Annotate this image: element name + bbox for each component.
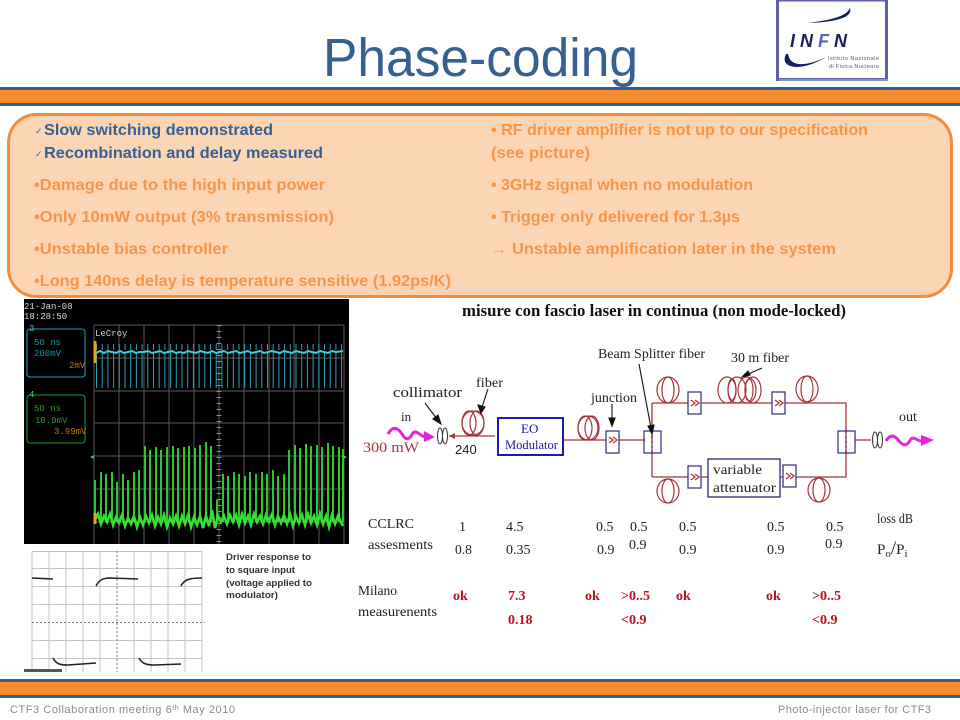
caption: driver response: Driver response to bbox=[226, 552, 311, 563]
text block: right column issues: • Trigger only delivered for 1.3µs bbox=[491, 209, 740, 226]
variable attenuator box bbox=[708, 459, 780, 497]
table: Milano measurements: ok bbox=[766, 589, 781, 604]
table: CCLRC assessments: 0.9 bbox=[679, 543, 696, 558]
channel 3 box: 200mV bbox=[34, 349, 62, 359]
footer left: CTF3 Collaboration meeting 6 bbox=[10, 704, 172, 716]
table: Milano measurements: <0.9 bbox=[621, 613, 646, 628]
text block: right column issues: • 3GHz signal when no modulation bbox=[491, 177, 753, 194]
text block: left column results: •Long 140ns delay is temperature sensitive (1.92ps/K) bbox=[34, 273, 451, 290]
text block: left column results: •Damage due to the high input power bbox=[34, 177, 325, 194]
EO modulator box: EO bbox=[521, 421, 538, 436]
table: Milano measurements bbox=[358, 584, 841, 628]
table: CCLRC assessments: 0.8 bbox=[455, 542, 472, 557]
channel 4 box: 3.99mV bbox=[54, 427, 87, 437]
table: Milano measurements: ok bbox=[585, 589, 600, 604]
title: Phase-coding bbox=[323, 28, 638, 88]
table: Milano measurements: 0.18 bbox=[508, 613, 532, 628]
table: CCLRC assessments: / bbox=[891, 538, 897, 559]
component labels: fiber bbox=[476, 376, 503, 391]
component labels: 300 mW bbox=[363, 440, 420, 456]
table: CCLRC assessments: 0.9 bbox=[767, 543, 784, 558]
text block: left column results: •Only 10mW output (3% transmission) bbox=[34, 209, 334, 226]
variable attenuator box: variable bbox=[713, 463, 762, 478]
text block: left column results: ✓ bbox=[35, 127, 43, 137]
output wave arrow bbox=[886, 435, 934, 446]
text block: left column results: •Unstable bias controller bbox=[34, 241, 228, 258]
table: Milano measurements: measurenents bbox=[358, 605, 437, 620]
channel 4 box: 4 bbox=[29, 390, 34, 400]
icon: INFN logo: IN F N bbox=[790, 31, 848, 51]
collimators bbox=[438, 428, 882, 448]
caption: driver response bbox=[226, 552, 312, 601]
fiber coils bbox=[462, 376, 830, 503]
table: CCLRC assessments: 1 bbox=[459, 520, 466, 535]
text block: left column results bbox=[34, 122, 451, 290]
component labels: junction bbox=[590, 391, 637, 406]
table: CCLRC assessments: 0.5 bbox=[826, 520, 844, 535]
EO modulator box: Modulator bbox=[505, 438, 559, 452]
component labels bbox=[363, 347, 917, 457]
chart: LeCroy oscilloscope trace: 18:28:50 bbox=[24, 312, 67, 322]
table: CCLRC assessments: o bbox=[885, 548, 891, 560]
footer right: Photo-injector laser for CTF3 bbox=[778, 704, 931, 716]
component labels: 240 bbox=[455, 442, 477, 457]
channel 3 box bbox=[27, 324, 86, 377]
trigger markers bbox=[94, 341, 96, 524]
EO modulator box bbox=[498, 418, 563, 455]
fiber lines bbox=[449, 403, 871, 477]
channel 4 box: 50 ns bbox=[34, 404, 61, 414]
table: Milano measurements: >0..5 bbox=[621, 589, 650, 604]
table: CCLRC assessments: 0.5 bbox=[679, 520, 696, 535]
table: CCLRC assessments: 0.9 bbox=[597, 543, 614, 558]
footer left: th bbox=[172, 705, 179, 712]
diagram: laser measurement setup bbox=[358, 301, 934, 628]
table: CCLRC assessments: assesments bbox=[368, 538, 433, 553]
table: Milano measurements: ok bbox=[676, 589, 691, 604]
beam splitters bbox=[644, 431, 855, 453]
table: Milano measurements: <0.9 bbox=[812, 613, 837, 628]
top divider bar bbox=[0, 88, 960, 104]
cyan trace bbox=[96, 347, 343, 370]
junction boxes bbox=[606, 392, 796, 488]
channel 4 box: 10.0mV bbox=[35, 416, 68, 426]
text block: right column issues: (see picture) bbox=[491, 145, 590, 162]
text block: right column issues: → Unstable amplification later in the system bbox=[491, 241, 836, 258]
table: CCLRC assessments: i bbox=[904, 548, 908, 560]
input wave arrow bbox=[388, 428, 435, 442]
caption: driver response: to square input bbox=[226, 565, 296, 576]
chart: LeCroy oscilloscope trace bbox=[24, 299, 349, 544]
channel 4 box bbox=[27, 390, 87, 443]
component labels: out bbox=[899, 410, 917, 425]
chart: LeCroy oscilloscope trace: LeCroy bbox=[95, 329, 128, 339]
caption: driver response: (voltage applied to bbox=[226, 578, 312, 589]
table: CCLRC assessments bbox=[368, 512, 913, 560]
channel 3 box: 3 bbox=[29, 324, 34, 334]
variable attenuator box: attenuator bbox=[713, 481, 776, 496]
table: CCLRC assessments: 0.9 bbox=[825, 537, 842, 552]
bottom divider bar bbox=[0, 680, 960, 696]
text block: left column results: Slow switching demonstrated bbox=[44, 122, 273, 139]
icon: INFN logo: Istituto Nazionale bbox=[828, 56, 879, 62]
table: CCLRC assessments: 0.35 bbox=[506, 543, 530, 558]
table: Milano measurements: >0..5 bbox=[812, 589, 841, 604]
table: CCLRC assessments: 0.5 bbox=[630, 520, 648, 535]
component labels: collimator bbox=[393, 385, 462, 401]
table: CCLRC assessments: CCLRC bbox=[368, 517, 414, 532]
table: CCLRC assessments: P bbox=[877, 542, 885, 558]
component labels: in bbox=[401, 409, 412, 424]
component labels: Beam Splitter fiber bbox=[598, 347, 705, 362]
text block: right column issues bbox=[491, 122, 868, 258]
chart: driver square wave response bbox=[24, 546, 209, 673]
green trace bbox=[95, 442, 343, 528]
text block: left column results: Recombination and delay measured bbox=[44, 145, 323, 162]
junction chevrons bbox=[609, 400, 794, 480]
table: CCLRC assessments: P bbox=[896, 542, 904, 558]
table: CCLRC assessments: 0.9 bbox=[629, 538, 646, 553]
icon: INFN logo: di Fisica Nucleare bbox=[829, 64, 879, 70]
heading: diagram title: misure con fascio laser in continua (non mode-locked) bbox=[462, 301, 846, 320]
channel 3 box: 2mV bbox=[69, 361, 86, 371]
table: Milano measurements: 7.3 bbox=[508, 589, 526, 604]
caption: driver response: modulator) bbox=[226, 590, 278, 601]
icon: INFN logo bbox=[778, 0, 888, 81]
panel: findings bbox=[8, 114, 952, 296]
footer left: May 2010 bbox=[179, 704, 235, 716]
table: CCLRC assessments: loss dB bbox=[877, 512, 913, 527]
timestamp: 21-Jan-08 bbox=[24, 302, 73, 312]
text block: right column issues: • RF driver amplifier is not up to our specification bbox=[491, 122, 868, 139]
table: CCLRC assessments: 4.5 bbox=[506, 520, 524, 535]
channel 3 box: 50 ns bbox=[34, 338, 61, 348]
table: CCLRC assessments: 0.5 bbox=[767, 520, 784, 535]
table: CCLRC assessments: 0.5 bbox=[596, 520, 614, 535]
text block: left column results: ✓ bbox=[35, 150, 43, 160]
table: Milano measurements: ok bbox=[453, 589, 468, 604]
callout arrows bbox=[425, 364, 762, 434]
table: Milano measurements: Milano bbox=[358, 584, 397, 599]
component labels: 30 m fiber bbox=[731, 351, 789, 366]
